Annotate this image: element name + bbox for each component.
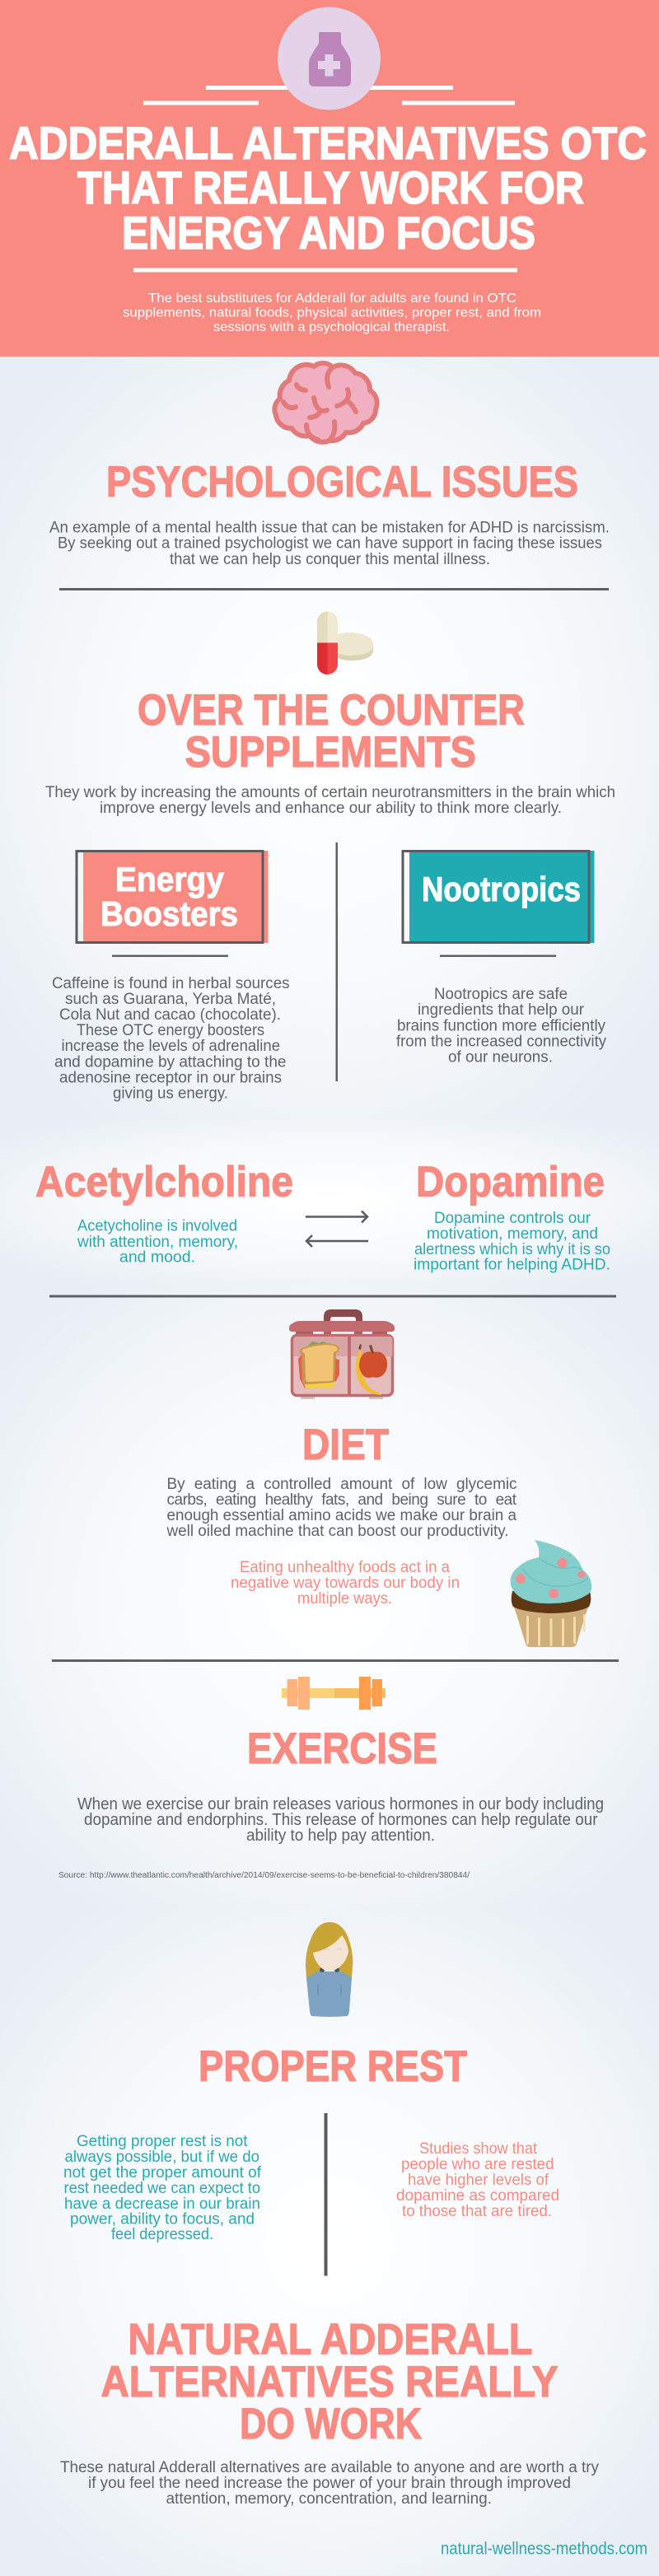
icon: brain	[274, 363, 377, 442]
body text	[77, 1217, 238, 1267]
body text: dopamine and endorphins. This release of hormones can help regulate our	[84, 1811, 598, 1829]
body text: By eating a controlled amount of low glycemic	[166, 1476, 517, 1493]
heading: PROPER REST	[199, 2042, 467, 2091]
label box: Nootropics	[422, 870, 581, 908]
body text: right: people who are rested	[401, 2156, 554, 2173]
callout text: multiple ways.	[297, 1590, 392, 1608]
body text: These natural Adderall alternatives are available to anyone and are worth a try	[60, 2459, 599, 2476]
title: ENERGY AND FOCUS	[122, 207, 535, 259]
body text: if you feel the need increase the power of your brain through improved	[88, 2475, 571, 2492]
source note: Source: http://www.theatlantic.com/health/archive/2014/09/exercise-seems-to-be-beneficial-to-children/380844/	[58, 1871, 470, 1880]
body text: adenosine receptor in our brains	[59, 1069, 282, 1087]
panel: nootropics	[396, 851, 606, 1066]
body text	[60, 2459, 599, 2508]
heading	[138, 686, 525, 777]
body text: of our neurons.	[448, 1049, 553, 1066]
body text: Cola Nut and cacao (chocolate).	[59, 1006, 281, 1024]
intro text	[123, 292, 541, 334]
panel: psychological issues	[49, 363, 610, 568]
heading: SUPPLEMENTS	[185, 728, 476, 777]
callout text	[231, 1559, 460, 1608]
body text	[414, 1210, 610, 1273]
panel: energy boosters	[52, 851, 290, 1102]
body text: Caffeine is found in herbal sources	[52, 975, 290, 992]
panel: proper rest	[63, 1922, 559, 2276]
header banner	[0, 0, 659, 357]
body text: right: to those that are tired.	[402, 2203, 552, 2220]
body text: that we can help us conquer this mental illness.	[170, 551, 490, 568]
body text: ability to help pay attention.	[246, 1827, 435, 1845]
body text: enough essential amino acids we make our brain a	[166, 1507, 516, 1524]
heading: NATURAL ADDERALL	[129, 2316, 532, 2364]
arrow: to acetylcholine	[306, 1235, 368, 1247]
heading	[100, 2316, 559, 2448]
body text: giving us energy.	[113, 1085, 228, 1102]
panel: over the counter supplements	[45, 611, 615, 817]
body text: alertness which is why it is so	[414, 1241, 610, 1258]
intro text: supplements, natural foods, physical activities, proper rest, and from	[123, 306, 541, 320]
body text	[77, 1795, 604, 1845]
icon: medicine bottle	[278, 7, 381, 110]
body text: left: rest needed we can expect to	[64, 2180, 260, 2197]
panel: exercise	[58, 1677, 604, 1880]
body text: motivation, memory, and	[427, 1225, 598, 1243]
callout text: Eating unhealthy foods act in a	[240, 1559, 450, 1576]
icon: lunch box	[289, 1309, 395, 1399]
body text: and mood.	[119, 1248, 195, 1267]
arrow: to dopamine	[306, 1211, 367, 1222]
body text: left: always possible, but if we do	[64, 2149, 259, 2166]
body text: and dopamine by attaching to the	[54, 1054, 287, 1071]
label box: Boosters	[100, 894, 238, 933]
body text: When we exercise our brain releases various hormones in our body including	[77, 1795, 604, 1813]
title: THAT REALLY WORK FOR	[77, 161, 584, 213]
heading: PSYCHOLOGICAL ISSUES	[106, 458, 578, 506]
body text	[166, 1476, 517, 1540]
body text: important for helping ADHD.	[414, 1257, 610, 1273]
body text: from the increased connectivity	[396, 1033, 606, 1051]
body text: increase the levels of adrenaline	[61, 1038, 280, 1055]
body text: right: dopamine as compared	[396, 2187, 559, 2205]
heading: Acetylcholine	[35, 1158, 293, 1206]
body text: Nootropics are safe	[434, 986, 568, 1003]
body text	[49, 519, 610, 568]
body text: right	[396, 2140, 559, 2220]
body text: left: power, ability to focus, and	[70, 2210, 255, 2228]
body text: attention, memory, concentration, and learning.	[166, 2490, 492, 2508]
body text: These OTC energy boosters	[77, 1022, 264, 1039]
intro text: sessions with a psychological therapist.	[213, 320, 450, 334]
title	[9, 117, 647, 259]
body text: left: not get the proper amount of	[63, 2164, 262, 2182]
panel: acetylcholine	[35, 1158, 293, 1267]
icon: cupcake	[511, 1540, 591, 1647]
label box	[77, 851, 269, 943]
body text: left: feel depressed.	[111, 2226, 213, 2243]
icon: pills	[317, 611, 373, 674]
icon: woman	[306, 1922, 353, 2017]
panel: conclusion	[60, 2316, 647, 2558]
body text: with attention, memory,	[77, 1234, 238, 1251]
body text: well oiled machine that can boost our productivity.	[166, 1523, 508, 1540]
body text: Dopamine controls our	[434, 1210, 591, 1227]
panel: dopamine	[414, 1158, 610, 1273]
callout text: negative way towards our body in	[231, 1575, 460, 1592]
body text: left	[63, 2133, 262, 2243]
panel: diet	[166, 1309, 591, 1647]
body text: left: Getting proper rest is not	[77, 2133, 248, 2150]
body text: ingredients that help our	[418, 1001, 585, 1019]
body text: right: have higher levels of	[408, 2172, 549, 2189]
body text: such as Guarana, Yerba Maté,	[65, 991, 276, 1008]
label box: Energy	[115, 860, 225, 898]
heading: ALTERNATIVES REALLY	[100, 2358, 559, 2406]
heading: Dopamine	[416, 1158, 605, 1206]
body text	[396, 986, 606, 1066]
heading: OVER THE COUNTER	[138, 686, 525, 735]
label box	[403, 851, 595, 943]
heading: EXERCISE	[247, 1724, 437, 1773]
heading: DO WORK	[240, 2400, 422, 2448]
intro text: The best substitutes for Adderall for adults are found in OTC	[148, 292, 516, 306]
body text: An example of a mental health issue that can be mistaken for ADHD is narcissism.	[49, 519, 610, 537]
body text: brains function more efficiently	[397, 1018, 605, 1034]
body text: improve energy levels and enhance our ability to think more clearly.	[100, 800, 562, 817]
icon: dumbbell	[282, 1677, 386, 1710]
heading: DIET	[302, 1421, 389, 1469]
body text: carbs, eating healthy fats, and being sure to eat	[166, 1491, 517, 1509]
body text: left: have a decrease in our brain	[64, 2196, 260, 2213]
body text: They work by increasing the amounts of certain neurotransmitters in the brain which	[45, 784, 615, 801]
body text	[52, 975, 290, 1102]
body text: By seeking out a trained psychologist we can have support in facing these issues	[58, 535, 602, 552]
body text: Acetycholine is involved	[77, 1217, 237, 1235]
body text	[45, 784, 615, 817]
body text: right: Studies show that	[419, 2140, 538, 2158]
